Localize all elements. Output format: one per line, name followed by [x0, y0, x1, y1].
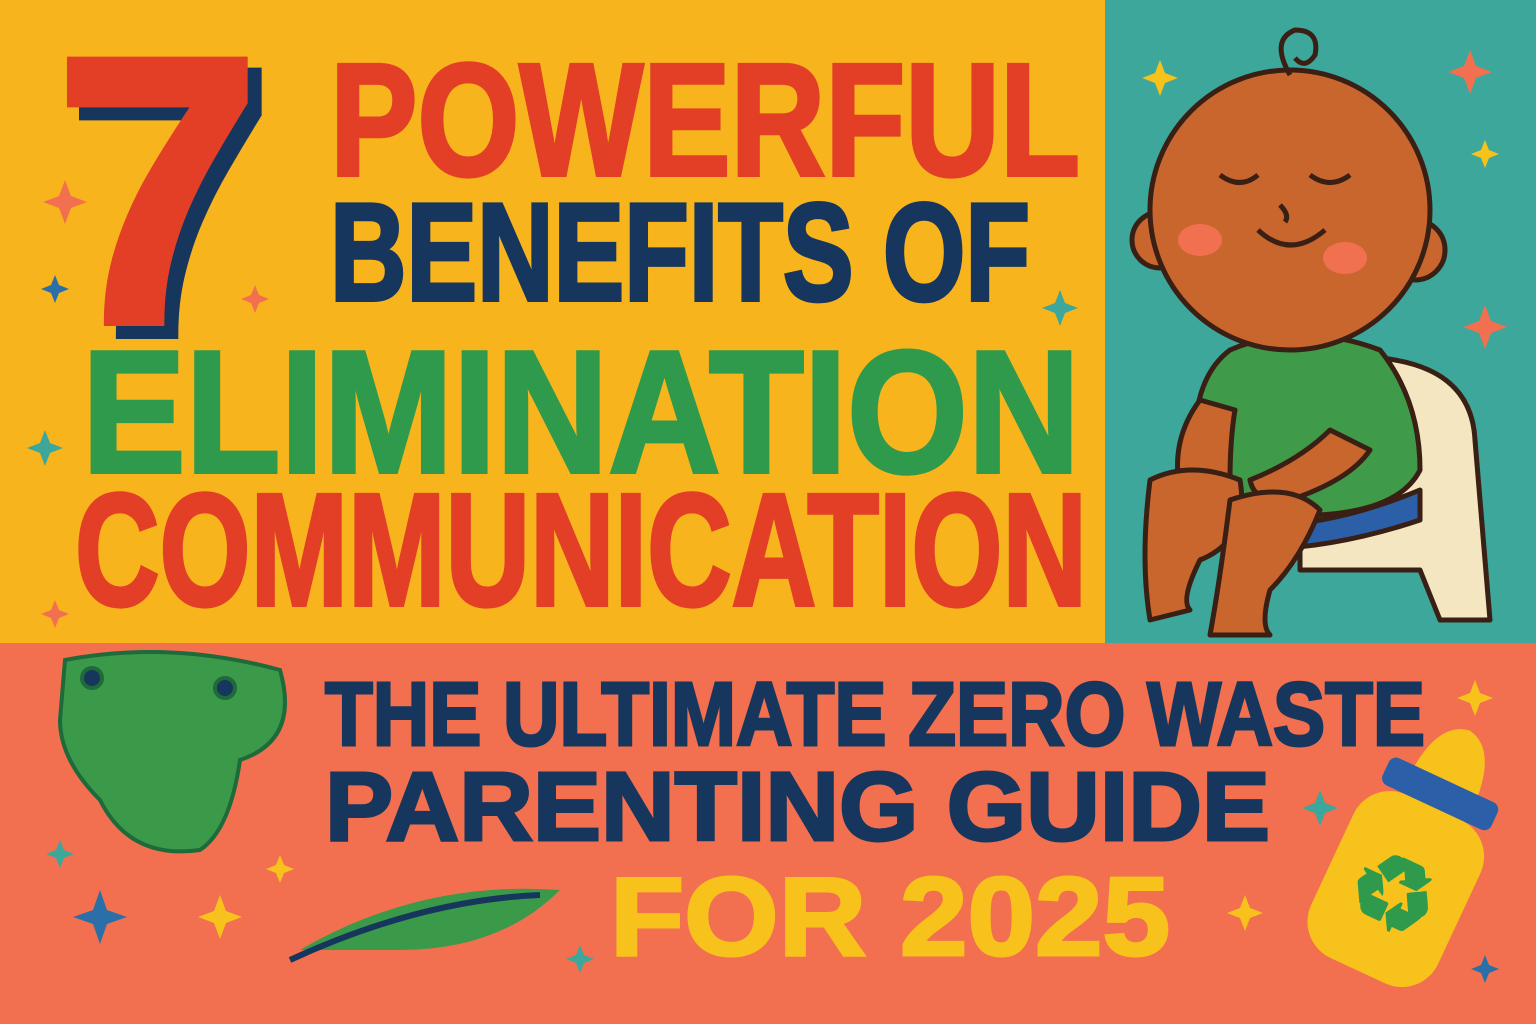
icon: diaper	[60, 652, 285, 851]
decorative sparkles	[41, 50, 1507, 628]
icon: baby bottle with recycle symbol	[1294, 701, 1533, 1000]
head	[1150, 70, 1430, 350]
title line: ELIMINATION: ELIMINATION	[82, 314, 1080, 509]
panel: title background	[0, 0, 1105, 643]
illustration: baby on potty	[1132, 30, 1490, 635]
title line: COMMUNICATION: COMMUNICATION	[75, 460, 1087, 639]
body	[1194, 335, 1420, 515]
title line: POWERFUL: POWERFUL	[330, 30, 1080, 209]
arms	[1178, 400, 1235, 493]
subtitle line 3: FOR 2025: FOR 2025	[610, 855, 1170, 979]
icon: baby bottle with recycle symbol: ♻	[1329, 825, 1458, 964]
curl	[1281, 30, 1316, 75]
face	[1220, 175, 1350, 245]
panel: baby background	[1105, 0, 1536, 643]
subtitle line 2: PARENTING GUIDE	[325, 752, 1270, 861]
legs	[1145, 470, 1242, 620]
icon: leaf	[290, 889, 560, 960]
panel: subtitle background	[0, 643, 1536, 1024]
big number 7: 7	[68, 0, 273, 415]
ears	[1132, 212, 1188, 268]
title line: BENEFITS OF: BENEFITS OF	[330, 175, 1030, 330]
cheeks	[1178, 224, 1367, 274]
potty	[1300, 357, 1490, 620]
